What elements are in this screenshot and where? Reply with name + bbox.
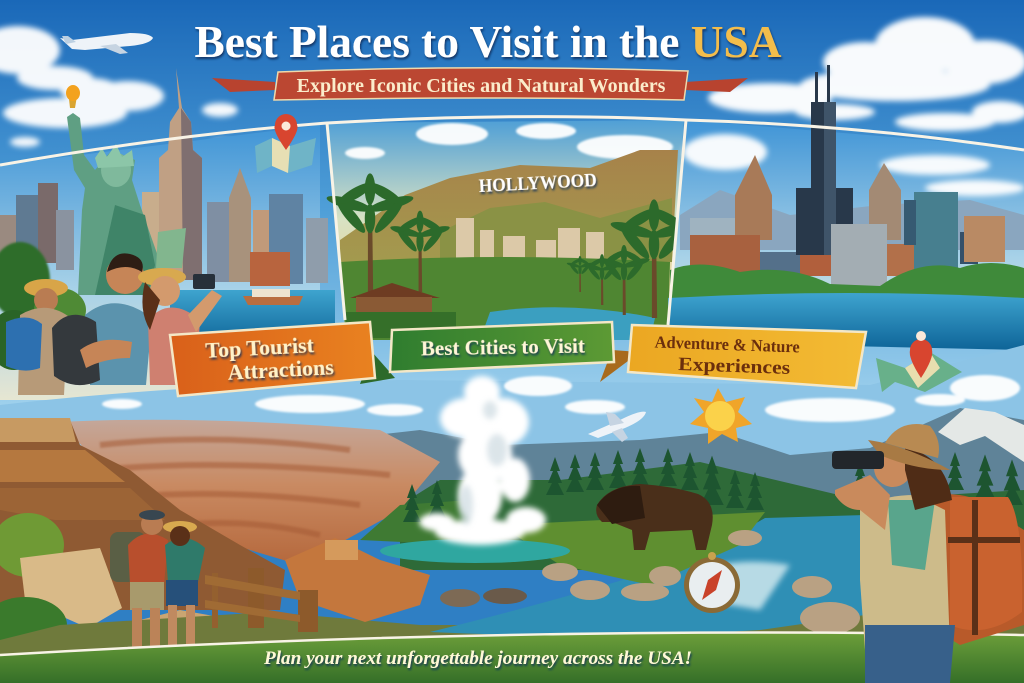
water [480,307,655,340]
hiking couple [110,510,318,665]
skyline buildings [0,168,328,286]
clouds top right [708,17,1024,131]
canyon [60,420,440,565]
grass by bison [500,512,765,585]
icon: airplane lower [588,412,646,442]
subtitle ribbon [212,68,748,100]
bottom scene [0,345,1024,683]
banner: best cities to visit [390,322,640,382]
clouds top left [0,26,238,150]
banner: top tourist attractions: Attractions [227,354,335,385]
banner: top tourist attractions: Top Tourist [205,332,315,363]
lake [668,293,1024,350]
footer grass band [0,632,1024,683]
panel: Hollywood [325,120,699,340]
photographer hiker [832,424,1024,683]
left woman [24,279,68,297]
man [85,303,152,385]
green ground [340,257,670,340]
sky background [0,0,1024,420]
sun [690,388,752,444]
icon: map with pin top [255,114,316,173]
far mountains [330,408,1024,520]
tourist group [6,253,222,395]
dark pines [403,448,1023,522]
bison [596,484,713,550]
panel: Chicago [668,65,1024,350]
geyser [419,376,546,545]
icon: airplane top left [60,33,153,54]
river [430,515,865,636]
banner: adventure and nature: Adventure & Nature [654,332,800,357]
woman with phone [148,308,200,385]
banner: adventure and nature: Experiences [678,354,791,379]
forest band [400,462,1024,570]
white panel frame lines [0,117,1024,325]
banner: top tourist attractions [170,322,395,396]
far mountains [680,190,1024,250]
subtitle ribbon: Explore Iconic Cities and Natural Wonders [297,75,666,97]
panel: New York skyline [0,68,335,400]
footer tagline: Plan your next unforgettable journey across the USA! [263,648,692,669]
bush near pool [360,500,470,545]
palm trees [325,173,699,318]
house [350,283,440,298]
hills [340,150,678,262]
trees strip [670,263,1024,298]
rocks [285,538,430,622]
bottom sky [0,345,1024,520]
Statue of Liberty [67,113,160,295]
Hollywood sign: HOLLYWOOD [478,170,597,197]
boat [243,296,303,305]
harbour water [170,290,335,345]
clouds [345,123,673,159]
Willis Tower [796,102,853,255]
city [456,218,604,266]
Empire State building [159,68,202,280]
trees left [0,242,50,318]
title: Best Places to Visit in the USA [194,16,782,67]
hot spring pool [380,539,570,563]
compass icon [684,552,740,613]
buildings [735,155,772,240]
banner: adventure and nature [628,325,866,388]
banner: best cities to visit: Best Cities to Visit [421,334,585,360]
ground [0,610,1024,683]
near left cliffs [0,420,285,610]
icon: map with pin right [876,331,962,392]
